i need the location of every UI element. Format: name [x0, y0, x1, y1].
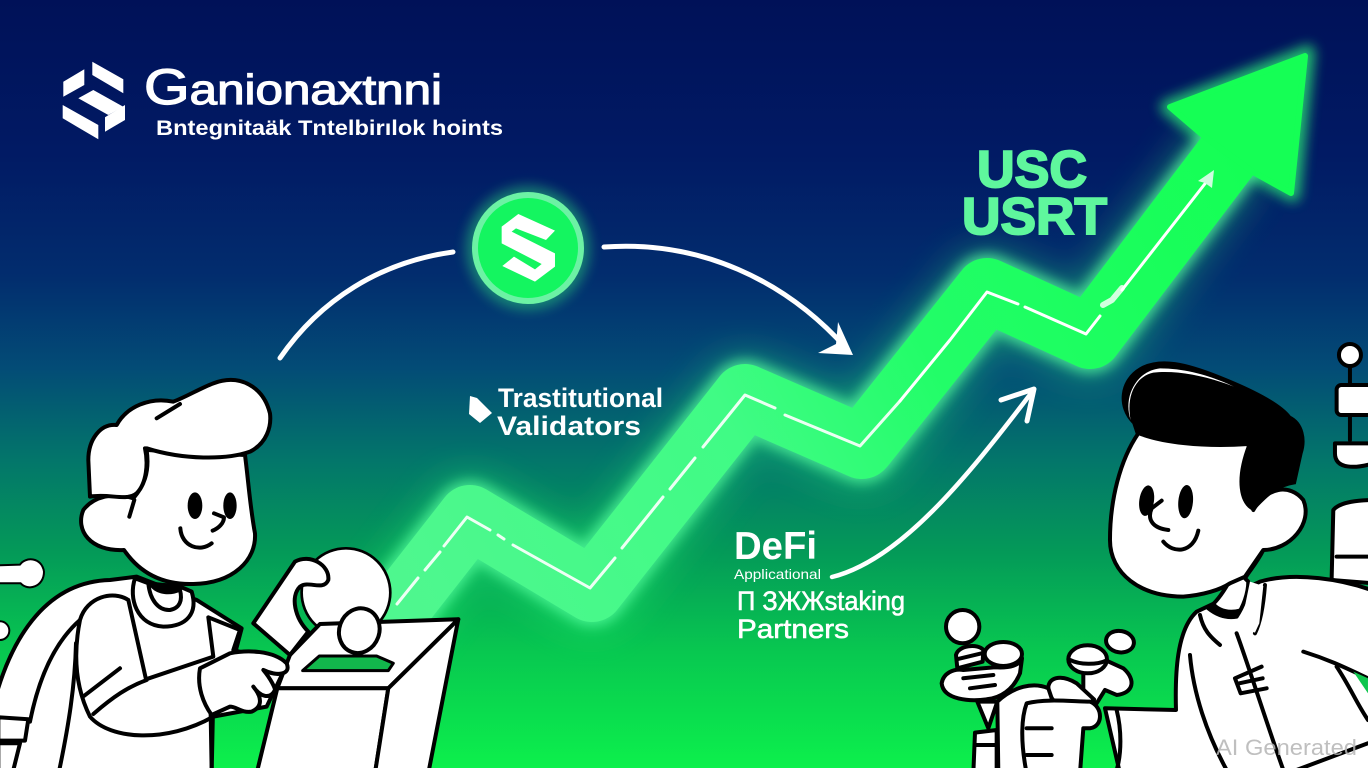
brand subtitle: Bntegnitaäk Tntelbirılok hoints: [156, 117, 503, 140]
DeFi partners label: [734, 525, 905, 644]
coin icon: [466, 186, 590, 310]
head: [81, 380, 270, 584]
torso and shirt: [1105, 577, 1368, 768]
DeFi partners label: Partners: [737, 614, 849, 644]
stablecoin label: [962, 141, 1107, 246]
right character with instruments: [942, 344, 1368, 768]
logo mark: [63, 62, 125, 139]
brand title: Ganionaxtnni: [144, 59, 442, 115]
institutional validators label: [469, 383, 663, 441]
growth arrow chart: [380, 52, 1308, 632]
stablecoin label: USC: [977, 141, 1087, 199]
right instrument: [1048, 629, 1136, 703]
raised arm and hand: [199, 559, 328, 715]
left character with ballot box: [0, 380, 458, 768]
ball and token: [302, 548, 390, 637]
ballot box: [257, 603, 458, 768]
left edge props: [0, 559, 44, 768]
curved arrow: DeFi to chart: [832, 389, 1034, 577]
curved arrow: coin to chart: [604, 246, 853, 355]
right edge equipment: [1332, 344, 1368, 583]
stablecoin label: USRT: [962, 188, 1107, 246]
institutional validators label: Validators: [497, 411, 641, 441]
watermark: AI Generated: [1216, 735, 1357, 760]
DeFi partners label: Π ЗЖЖstaking: [737, 586, 905, 616]
right hand fist: [997, 685, 1120, 768]
DeFi partners label: Applicational: [734, 566, 821, 582]
torso and cape: [0, 577, 287, 768]
institutional validators label: Trastitutional: [498, 383, 663, 413]
left instrument: [942, 610, 1022, 768]
collar: [133, 578, 194, 627]
DeFi partners label: DeFi: [734, 525, 817, 568]
arrow inner trace line: [397, 170, 1214, 604]
neck: [1208, 550, 1263, 633]
curved arrow: left arc to coin: [280, 252, 453, 358]
head: [1110, 362, 1306, 597]
